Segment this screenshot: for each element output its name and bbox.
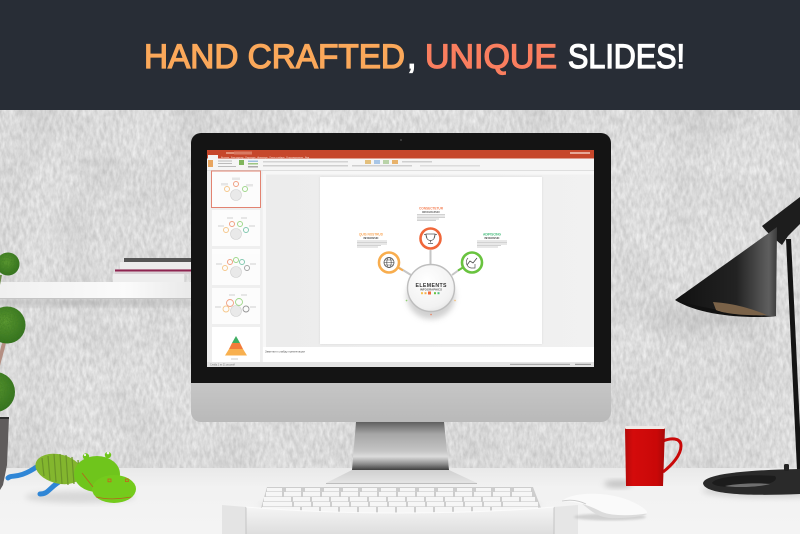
computer mouse bbox=[562, 494, 647, 520]
keyboard tray bbox=[222, 505, 578, 534]
thumbnail 3 bbox=[212, 249, 260, 285]
wall shelf bbox=[0, 282, 191, 306]
thumbnail 4 bbox=[212, 288, 260, 324]
red coffee mug bbox=[604, 426, 681, 488]
slide editor workspace bbox=[263, 171, 594, 347]
ribbon title bar: Вставка Конструктор Переходы Анимация Показ слайдов Рецензирование Вид bbox=[221, 156, 310, 159]
block: quis nostrud: QUIS NOSTRUD bbox=[359, 232, 384, 236]
lamp pole bbox=[786, 239, 800, 470]
stacked books bbox=[113, 258, 191, 282]
thumbnail 2 bbox=[212, 210, 260, 246]
wireless keyboard bbox=[258, 487, 542, 514]
notes pane bbox=[263, 347, 594, 362]
thumbnail 1 bbox=[212, 171, 260, 208]
connector lines bbox=[397, 250, 464, 275]
title banner: SLIDES! bbox=[568, 38, 685, 76]
block: consectetur: INFOGRAPHIC bbox=[422, 211, 440, 214]
desk bbox=[0, 468, 800, 534]
slide thumbnail panel bbox=[207, 171, 262, 362]
accent markers bbox=[405, 299, 456, 317]
title banner: HAND CRAFTED bbox=[144, 38, 405, 76]
monitor stand bbox=[326, 422, 477, 484]
accent markers: + bbox=[405, 299, 408, 303]
block: adipiscing: ADIPISCING bbox=[483, 232, 502, 236]
plush crocodile toy bbox=[8, 449, 136, 503]
desk lamp bbox=[675, 197, 800, 498]
central hub: INFOGRAPHICS bbox=[420, 288, 442, 292]
monitor body bbox=[191, 133, 611, 422]
title banner: , bbox=[407, 38, 416, 76]
central hub bbox=[407, 264, 455, 319]
thumbnail 5: pyramid bbox=[212, 327, 260, 362]
lamp base bbox=[702, 464, 800, 498]
node: globe bbox=[379, 252, 399, 272]
application screen bbox=[207, 150, 594, 367]
block: quis nostrud: INFOGRAPHIC bbox=[364, 237, 379, 240]
status bar bbox=[207, 362, 594, 367]
accent markers: + bbox=[430, 313, 432, 317]
block: consectetur bbox=[417, 206, 445, 220]
block: adipiscing bbox=[477, 232, 507, 247]
title banner: UNIQUE bbox=[425, 38, 557, 76]
lamp shade bbox=[675, 197, 800, 317]
central hub: ELEMENTS bbox=[416, 283, 447, 289]
block: quis nostrud bbox=[357, 232, 387, 247]
block: adipiscing: INFOGRAPHIC bbox=[484, 237, 500, 240]
desktop monitor bbox=[191, 133, 611, 484]
block: consectetur: CONSECTETUR bbox=[419, 206, 444, 210]
notes pane: Заметки к слайду презентации bbox=[265, 350, 305, 354]
node: chart bbox=[462, 252, 482, 272]
ribbon toolbar bbox=[207, 158, 594, 171]
status bar: Слайд 1 из 21 русский bbox=[210, 364, 236, 366]
topiary plant bbox=[0, 252, 26, 490]
title banner bbox=[0, 0, 800, 110]
white slide bbox=[320, 177, 542, 344]
wall background bbox=[0, 110, 800, 470]
node: trophy bbox=[420, 228, 440, 248]
lamp wall shadow bbox=[645, 304, 755, 332]
ribbon title bar bbox=[207, 150, 594, 159]
accent markers: + bbox=[454, 299, 456, 303]
